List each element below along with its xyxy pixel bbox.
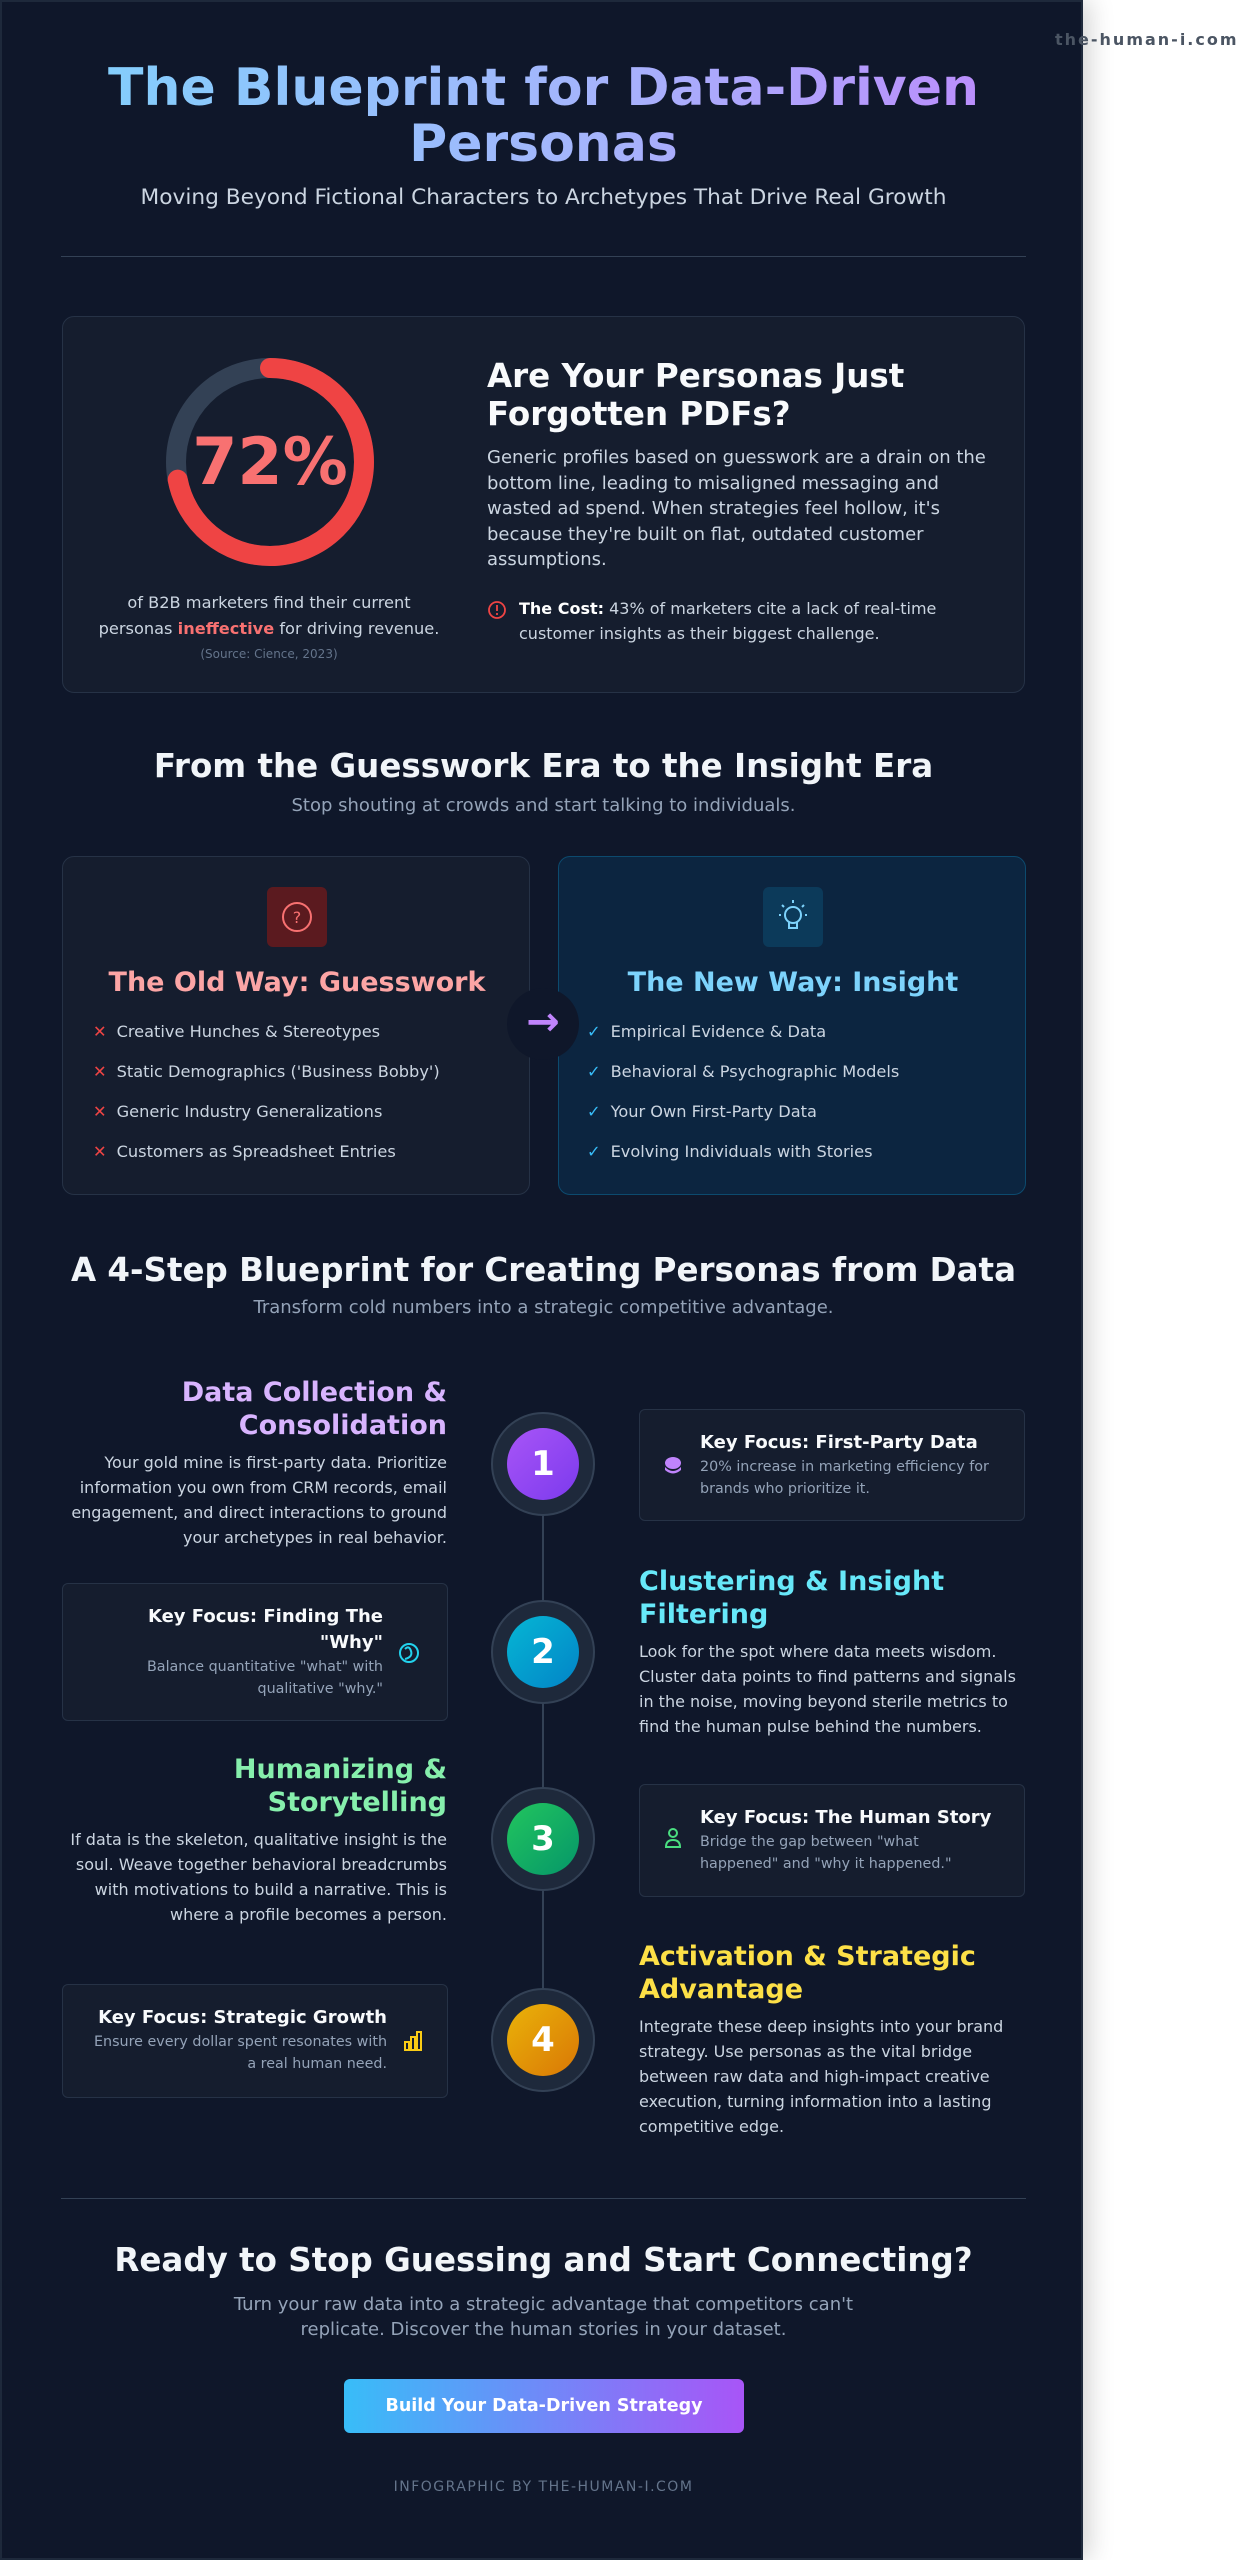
step 4 key focus: Ensure every dollar spent resonates with <box>94 2034 387 2050</box>
section subtitle: Stop shouting at crowds and start talking to individuals. <box>292 795 795 816</box>
subtitle: Moving Beyond Fictional Characters to Archetypes That Drive Real Growth <box>140 185 946 210</box>
section heading: blueprint: A 4-Step Blueprint for Creating Personas from Data <box>71 1251 1016 1289</box>
step 2: Look for the spot where data meets wisdom. Cluster data points to find patterns and signals in the noise, moving beyond sterile metrics to find the human pulse behind the numbers. <box>639 1642 1016 1736</box>
step 2 number <box>491 1600 595 1704</box>
step 4: Activation & Strategic <box>639 1941 976 1972</box>
step 3 <box>70 1754 447 1924</box>
step 2 number: 2 <box>531 1632 555 1672</box>
list: ✕ Static Demographics ('Business Bobby') <box>93 1062 440 1081</box>
step 2: Clustering & Insight <box>639 1566 944 1597</box>
step 3 key focus: Key Focus: The Human Story <box>700 1807 991 1828</box>
step 4 number <box>491 1988 595 2092</box>
list: ✕ Generic Industry Generalizations <box>93 1102 382 1121</box>
stat caption <box>99 593 439 661</box>
step 1 key focus: Key Focus: First-Party Data <box>700 1432 978 1453</box>
title: The New Way: Insight <box>628 967 958 998</box>
step 3 key focus: Bridge the gap between "what happened" and "why it happened." <box>700 1834 952 1872</box>
step 3 number <box>491 1787 595 1891</box>
step 4 <box>639 1941 1003 2136</box>
step 1 number <box>491 1412 595 1516</box>
heading: Are Your Personas Just <box>487 357 904 395</box>
title: The Old Way: Guesswork <box>109 967 485 998</box>
step 4: Advantage <box>639 1974 803 2005</box>
step 4 key focus: a real human need. <box>247 2056 387 2072</box>
step 4 key focus <box>62 1984 448 2098</box>
heading: Forgotten PDFs? <box>487 395 791 433</box>
heading <box>487 357 904 433</box>
step 1 key focus: 20% increase in marketing efficiency for brands who prioritize it. <box>700 1459 989 1497</box>
list <box>587 1022 899 1161</box>
footer: INFOGRAPHIC BY THE-HUMAN-I.COM <box>394 2479 693 2495</box>
stat caption: (Source: Cience, 2023) <box>200 647 338 661</box>
list: ✓ Evolving Individuals with Stories <box>587 1142 873 1161</box>
title: The Blueprint for Data-Driven <box>108 58 979 118</box>
title: Personas <box>409 114 678 174</box>
step 1: Your gold mine is first-party data. Prioritize information you own from CRM records, email engagement, and direct interactions to ground your archetypes in real behavior. <box>71 1453 447 1547</box>
step 3: Storytelling <box>268 1787 447 1818</box>
step 4 key focus: Key Focus: Strategic Growth <box>98 2007 387 2028</box>
step 1: Consolidation <box>239 1410 447 1441</box>
paragraph: Generic profiles based on guesswork are a drain on the bottom line, leading to misaligned messaging and wasted ad spend. When strategies feel hollow, it's because they're built on flat, outdated customer assumptions. <box>487 447 986 570</box>
step 2 key focus: Key Focus: Finding The "Why" <box>148 1606 383 1653</box>
list: ✓ Behavioral & Psychographic Models <box>587 1062 899 1081</box>
step 1: Data Collection & <box>182 1377 447 1408</box>
step 1 number: 1 <box>531 1444 555 1484</box>
stat caption: personas ineffective for driving revenue. <box>99 619 439 638</box>
list: ✕ Creative Hunches & Stereotypes <box>93 1022 380 1041</box>
list: ✓ Your Own First-Party Data <box>587 1102 817 1121</box>
list <box>93 1022 440 1161</box>
step 4: Integrate these deep insights into your brand strategy. Use personas as the vital bridge between raw data and high-impact creative execution, turning information into a lasting competitive edge. <box>639 2017 1003 2136</box>
icon: question <box>267 887 327 947</box>
CTA button: Build Your Data-Driven Strategy <box>385 2396 703 2416</box>
step 3: If data is the skeleton, qualitative insight is the soul. Weave together behavioral breadcrumbs with motivations to build a narrative. This is where a profile becomes a person. <box>70 1830 447 1924</box>
panel: stat <box>62 316 1025 693</box>
CTA button <box>344 2379 744 2433</box>
step 3 number: 3 <box>531 1819 555 1859</box>
watermark: the-human-i.com <box>1055 30 1239 49</box>
donut chart 72%: 72% <box>192 425 348 500</box>
section heading: eras: From the Guesswork Era to the Insight Era <box>154 747 933 785</box>
stat caption: of B2B marketers find their current <box>127 593 411 612</box>
step 4 number: 4 <box>531 2020 555 2060</box>
panel: old way <box>62 856 530 1195</box>
step 3: Humanizing & <box>234 1754 447 1785</box>
list: ✓ Empirical Evidence & Data <box>587 1022 826 1041</box>
step 1 <box>71 1377 447 1547</box>
step 3 key focus <box>639 1784 1025 1897</box>
icon: question: ? <box>293 908 301 927</box>
step 2 key focus <box>62 1583 448 1721</box>
step 1 key focus <box>639 1409 1025 1521</box>
arrow <box>507 988 579 1060</box>
panel: new way <box>558 856 1026 1195</box>
cost note: The Cost: 43% of marketers cite a lack of real-time customer insights as their biggest challenge. <box>519 599 936 643</box>
list: ✕ Customers as Spreadsheet Entries <box>93 1142 396 1161</box>
title <box>2 60 1085 172</box>
CTA text: Turn your raw data into a strategic advantage that competitors can't replicate. Discover the human stories in your dataset. <box>234 2294 853 2340</box>
section subtitle: Transform cold numbers into a strategic competitive advantage. <box>253 1297 834 1318</box>
CTA heading: Ready to Stop Guessing and Start Connecting? <box>114 2241 973 2279</box>
arrow: → <box>526 999 560 1045</box>
step 2 <box>639 1566 1016 1736</box>
step 2 key focus: Balance quantitative "what" with qualitative "why." <box>147 1659 383 1697</box>
donut chart 72% <box>166 358 374 566</box>
icon: alert <box>488 601 506 619</box>
icon: lightbulb <box>763 887 823 947</box>
step 2: Filtering <box>639 1599 768 1630</box>
